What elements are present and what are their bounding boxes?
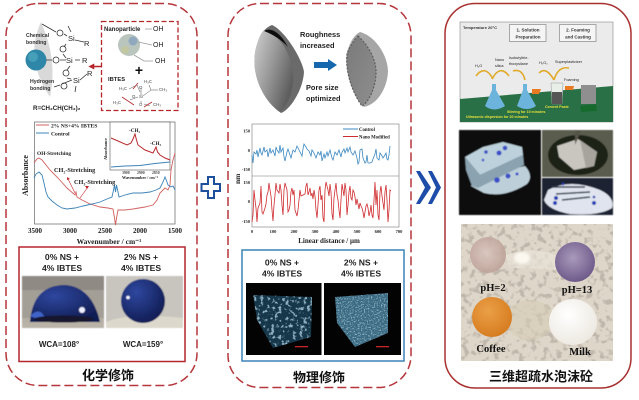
photo: droplets of liquids on foam: Milk [569,347,591,358]
surface profile chart [233,124,403,245]
FTIR annotations [37,151,116,198]
WCA comparison box: 4% IBTES [42,263,82,273]
FTIR axes labels: Absorbance [21,155,30,196]
FTIR legend: 2% NS+4% IBTES [51,124,97,130]
process scheme: Foaming [564,78,579,82]
molecular structure diagram [26,22,93,112]
profile legend [343,128,390,140]
process scheme: Ultrasonic dispersion for 20 minutes [466,115,528,119]
molecular structure diagram: R [84,39,90,48]
reagent box: nanoparticle and IBTES: Nanoparticle [104,27,141,33]
profile axes: 700 [396,229,403,234]
profile: nano modified [252,182,391,222]
process scheme: Cement Paste [545,105,569,109]
process scheme: Stirring for 10 minutes [507,110,545,114]
molecular structure diagram: Si [66,56,73,65]
pore structure comparison box: 4% IBTES [341,268,381,278]
WCA comparison box: WCA=108° [39,340,79,349]
droplet: pH=13 [555,242,595,282]
CT image: 0% NS [246,283,322,355]
FTIR inset [103,122,170,180]
WCA comparison box: 4% IBTES [121,263,161,273]
reagent box: nanoparticle and IBTES: OH [153,42,164,49]
label: 3D superhydrophobic foamed concrete: 三维超疏水泡沫砼 [489,369,593,384]
reagent box: nanoparticle and IBTES [102,22,178,110]
process scheme: thoxysilane [509,62,528,66]
reagent box: nanoparticle and IBTES: OH [153,26,164,33]
molecular structure diagram: Si [73,76,80,85]
process scheme: Preparation [515,34,541,40]
photo: white foam with droplets [542,178,613,215]
process scheme: Isobutyltrie- [509,56,529,60]
reagent box: nanoparticle and IBTES: Si [139,94,143,99]
process scheme: Temperature 20°C [463,25,497,30]
molecular structure diagram: bonding [26,40,46,46]
photo: droplets of liquids on foam: pH=2 [480,283,506,294]
text: pore size optimized: Pore size [306,83,338,92]
process scheme: H₂O₂ [539,61,548,65]
droplet: coffee [472,297,512,337]
profile axes: 500 [354,229,361,234]
profile axes: 0 [248,148,251,153]
pore hemisphere: before [254,25,304,113]
photo: droplet WCA 108 [22,276,104,328]
reagent box: nanoparticle and IBTES: O [139,85,143,90]
reagent box: nanoparticle and IBTES: OH [155,58,166,65]
arrow: process [314,59,337,71]
pore structure comparison box [242,250,404,361]
reagent box: nanoparticle and IBTES: + [135,62,143,78]
molecular structure diagram: Chemical [26,33,50,39]
arrow: reagents to surface [89,64,101,69]
FTIR annotations: CH₂-Stretching [54,167,96,174]
molecular structure diagram: Si [68,34,75,43]
label: physical modification: 物理修饰 [293,370,345,385]
reagent box: nanoparticle and IBTES: IBTES [108,77,125,83]
molecular structure diagram: R [82,56,88,65]
panel: chemical modification [6,4,197,386]
FTIR annotations: CH₃-Stretching [74,179,116,186]
reagent box: nanoparticle and IBTES: CH₃ [159,87,167,92]
FTIR axes labels: 2500 [98,227,112,235]
FTIR curve: control [34,172,175,209]
molecular structure diagram: R=CH₂CH(CH₃)₂ [33,105,81,112]
profile axes: nm [233,173,242,184]
CT image: 2% NS [324,283,401,355]
FTIR axes labels: 2000 [133,227,148,235]
photo: droplets of liquids on foam [461,224,613,361]
FTIR inset: 2850 [152,171,160,175]
process scheme: silica [495,64,504,68]
WCA comparison box: 0% NS + [45,252,79,262]
profile: control [252,144,390,164]
profile axes: Linear distance / μm [298,237,360,245]
profile axes: -150 [242,219,251,224]
WCA comparison box: WCA=159° [123,340,163,349]
profile axes: 0 [248,199,251,204]
molecular structure diagram: bonding [30,86,50,92]
pore structure comparison box: 2% NS + [344,258,378,268]
WCA comparison box: 2% NS + [124,252,158,262]
process scheme [460,22,613,122]
profile axes: 0 [251,229,254,234]
reagent box: nanoparticle and IBTES: H₃C [113,100,121,105]
FTIR inset: -CH₂ [129,128,141,134]
photo: foam block in water [542,130,613,177]
FTIR chart [21,122,182,246]
process scheme: 1. Solution [516,28,540,32]
profile legend: Nano Modified [359,136,390,140]
reagent box: nanoparticle and IBTES: O [139,102,143,107]
profile axes [233,128,403,245]
process scheme: Superplasticizer [555,60,583,64]
FTIR legend: Control [51,132,70,138]
profile axes: 400 [333,229,340,234]
FTIR inset: -CH₃ [150,141,162,147]
reagent box: nanoparticle and IBTES: O [132,94,136,99]
FTIR inset: 3900 [122,171,130,175]
FTIR legend [36,124,97,138]
profile axes: 150 [243,180,251,185]
profile axes: -150 [242,167,251,172]
icon: double chevron [416,171,441,204]
FTIR axes labels: 3500 [28,227,42,235]
process scheme: and Casting [565,34,591,40]
photo: droplets of liquids on foam: pH=13 [562,285,592,296]
panel: 3D superhydrophobic foamed concrete [445,4,631,388]
reagent box: nanoparticle and IBTES: H₃C [119,86,127,91]
photo: droplets of liquids on foam: Coffee [476,344,506,355]
profile axes: 300 [312,229,319,234]
process scheme: 2. Foaming [566,28,590,32]
FTIR inset: 2900 [137,171,145,175]
molecular structure diagram: R [87,69,93,78]
FTIR axes labels: 3000 [63,227,78,235]
profile axes: 150 [243,128,251,134]
pore hemisphere: after [346,32,388,107]
droplet: milk [549,299,597,345]
text: pore size optimized: optimized [306,94,341,103]
FTIR annotations: OH-Stretching [37,151,71,157]
FTIR inset: Absorbance [103,138,108,160]
FTIR axes labels: 1500 [168,227,182,235]
reagent box: nanoparticle and IBTES: CH₃ [153,102,161,107]
molecular structure diagram: Hydrogen [30,79,54,85]
photo: water droplets on foam slab [459,130,541,215]
FTIR curve: modified [34,153,175,225]
pore structure comparison box: 0% NS + [265,258,299,268]
process scheme: Nano [495,58,504,62]
text: roughness increased: Roughness [300,30,340,39]
text: roughness increased: increased [300,41,335,50]
FTIR axes labels: Wavenumber / cm⁻¹ [77,237,141,246]
FTIR axes labels [21,155,182,246]
profile axes: 600 [375,229,382,234]
reagent box: nanoparticle and IBTES: H₃C [144,79,152,84]
FTIR inset: Wavenumber / cm⁻¹ [122,175,159,180]
icon: plus [202,177,220,198]
droplet: pH=2 [470,237,506,273]
profile legend: Control [359,128,376,133]
label: chemical modification: 化学修饰 [82,368,134,383]
WCA comparison box [19,247,185,362]
panel: physical modification [228,4,411,388]
profile axes: 200 [291,229,298,234]
profile axes: 100 [270,229,277,234]
process scheme: H₂O [475,64,482,68]
pore structure comparison box: 4% IBTES [262,268,302,278]
photo: droplet WCA 159 [106,276,183,328]
